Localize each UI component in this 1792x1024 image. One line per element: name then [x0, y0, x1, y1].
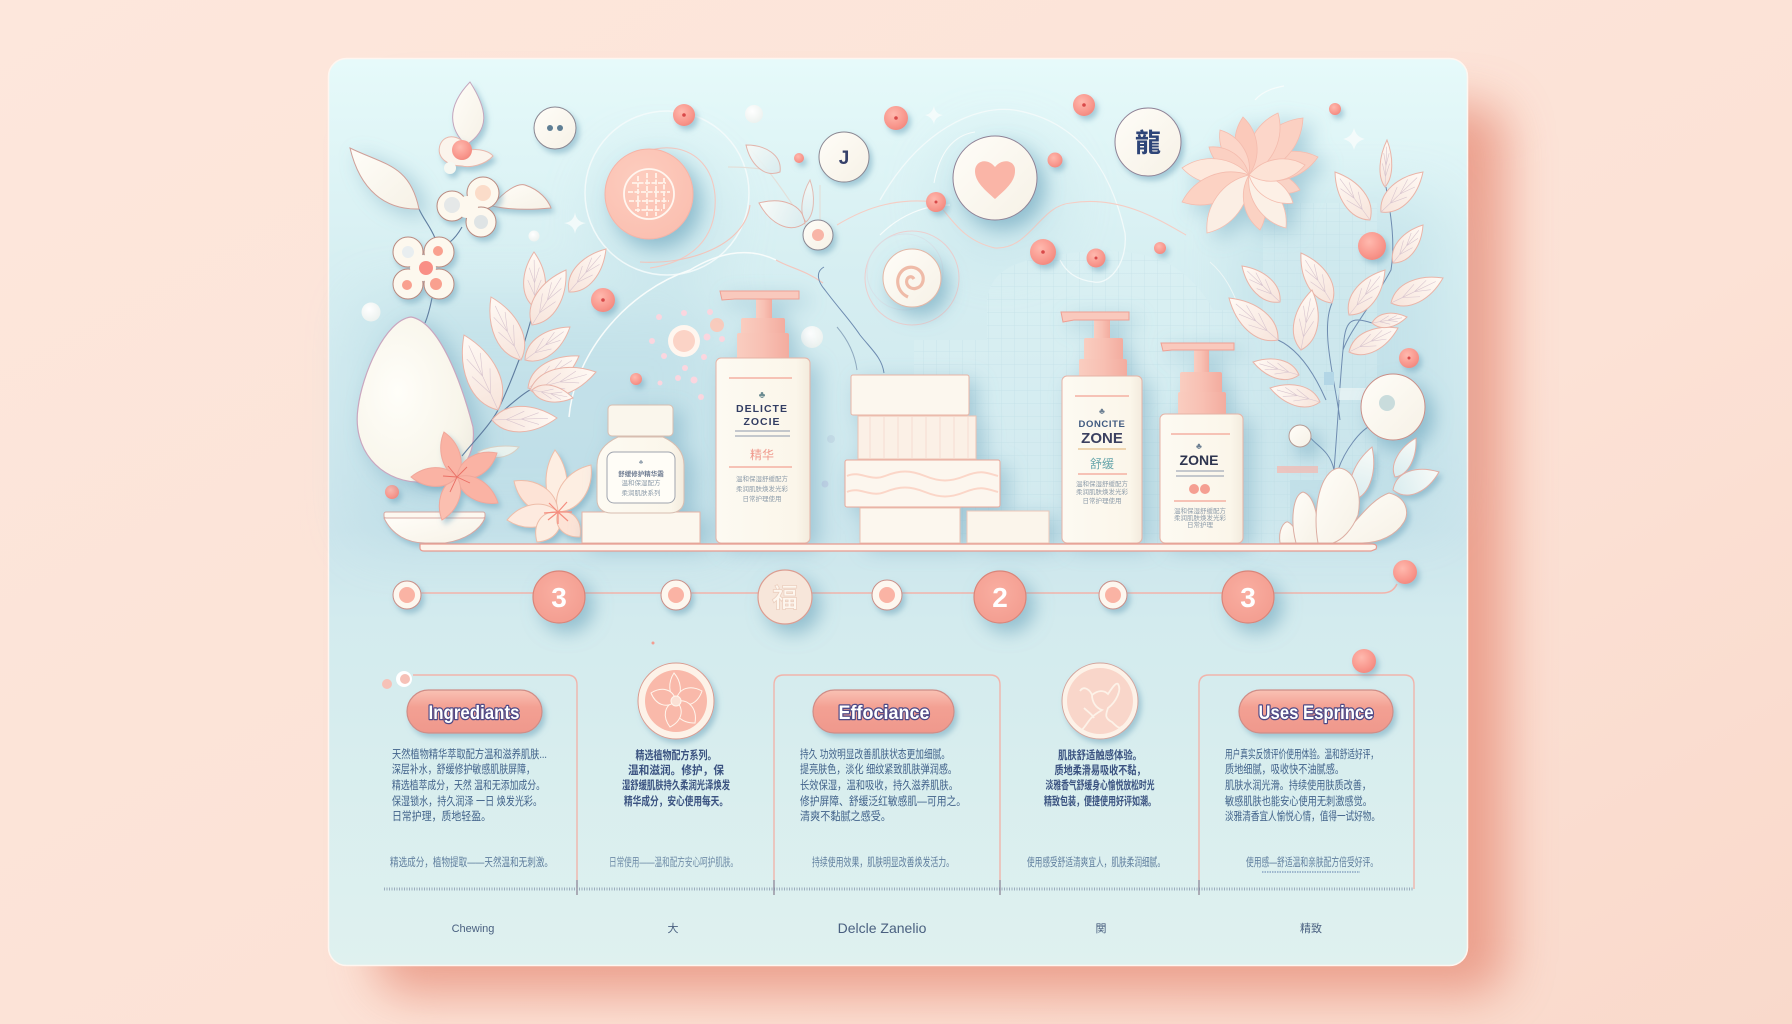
- product: pump bottle one: 温和保湿舒缓配方: [736, 474, 788, 483]
- panel: ingredients: [382, 671, 553, 869]
- product: pump bottle one: 日常护理使用: [742, 494, 782, 503]
- decorative pink and white dots: [362, 94, 1419, 499]
- accent dot: [1352, 649, 1376, 673]
- product: pump bottle two: ♣: [1099, 406, 1105, 416]
- heading pill: Effociance: [838, 703, 930, 724]
- product: pump bottle two: 温和保湿舒缓配方: [1076, 479, 1128, 488]
- timeline line: [407, 584, 1397, 593]
- footer labels: 大: [668, 921, 678, 935]
- body text: 长效保湿，温和吸收，持久滋养肌肤。: [800, 778, 958, 792]
- product: pump bottle one: ♣: [759, 390, 766, 401]
- product: pump bottle one: 柔润肌肤焕发光彩: [736, 484, 788, 493]
- botanical: left sprig and water drop: [357, 242, 614, 484]
- four petal flower: [393, 237, 454, 299]
- botanical: bottom right petals: [1280, 434, 1443, 543]
- soft blue tint behind products: [360, 140, 1440, 540]
- heading pill: [813, 690, 954, 733]
- panel: user experience: [1225, 649, 1393, 872]
- product: pump bottle one: [716, 291, 810, 543]
- panel: flower medallion column: [609, 663, 738, 869]
- icon: pink disc with globe grid: [605, 149, 693, 239]
- flowing decorative lines: [569, 86, 1284, 417]
- clover flower: [437, 177, 499, 237]
- timeline: [393, 560, 1417, 624]
- heading pill: [1239, 690, 1393, 733]
- footer labels: 関: [1096, 922, 1106, 935]
- body text: 温和滋润。修护，保: [628, 763, 724, 777]
- timeline node: [393, 581, 421, 609]
- footer labels: 精致: [1300, 921, 1322, 935]
- decorative large and small spheres: [1289, 374, 1425, 447]
- footnote: 使用感—舒适温和亲肤配方倍受好评。: [1246, 855, 1378, 869]
- body text: [1044, 748, 1156, 808]
- footnote: 使用感受舒适清爽宜人，肌肤柔润细腻。: [1027, 855, 1165, 869]
- body text: 精选植萃成分，天然 温和无添加成分。: [392, 778, 545, 792]
- heading pill: Uses Esprince: [1258, 703, 1374, 724]
- body text: [622, 748, 730, 808]
- botanical: right sprig: [1221, 140, 1448, 473]
- footer labels: [452, 920, 1322, 936]
- icon: spiral button: [883, 249, 941, 307]
- jar lid: [608, 405, 673, 436]
- small accent dot: [652, 642, 654, 644]
- icon: kanji button: 龍: [1135, 128, 1161, 158]
- body text: 敏感肌肤也能安心使用无刺激感觉。: [1225, 794, 1372, 808]
- product: pump bottle three: 温和保湿舒缓配方: [1174, 506, 1226, 515]
- product: jar on box: ♣: [639, 459, 644, 466]
- icon: sparkles: [564, 106, 1365, 234]
- panel: efficiency: [800, 690, 966, 869]
- timeline node: [1099, 581, 1127, 609]
- icon: flower medallion: [638, 663, 714, 739]
- product: pump bottle two: 舒缓: [1090, 457, 1114, 471]
- product: jar on box: 温和保湿配方: [622, 478, 661, 487]
- step number 2: 2: [992, 582, 1008, 613]
- shelf: [420, 544, 1376, 551]
- icon: J number button: J: [839, 148, 849, 169]
- step number 2: [974, 571, 1026, 623]
- body text: 湿舒缓肌肤持久柔润光泽焕发: [622, 778, 730, 792]
- jar body: [597, 437, 684, 513]
- footer labels: Chewing: [452, 923, 494, 935]
- panel: figure medallion column: [1027, 663, 1165, 869]
- body text: 肌肤舒适触感体验。: [1058, 748, 1142, 762]
- product: pump bottle one: DELICTE: [736, 403, 788, 415]
- step number 3: [1222, 571, 1274, 623]
- heading pill: [407, 690, 542, 733]
- body text: 淡雅香气舒缓身心愉悦放松时光: [1046, 778, 1155, 792]
- product: pump bottle three: 柔润肌肤焕发光彩: [1174, 513, 1226, 522]
- botanical: pale flower: [505, 449, 601, 548]
- footnote: 日常使用——温和配方安心呵护肌肤。: [609, 855, 738, 869]
- product: pump bottle two: ZONE: [1081, 430, 1123, 447]
- body text: 淡雅清香宜人愉悦心情，值得一试好物。: [1225, 809, 1380, 823]
- botanical: lotus flower: [1177, 108, 1321, 241]
- body text: 提亮肤色，淡化 细纹紧致肌肤弹润感。: [800, 762, 957, 776]
- body text: [392, 747, 547, 823]
- body text: 深层补水，舒缓修护敏感肌肤屏障，: [392, 762, 535, 776]
- body text: 持久 功效明显改善肌肤状态更加细腻。: [800, 747, 950, 761]
- body text: 质地细腻，吸收快不油腻感。: [1225, 762, 1344, 776]
- product: pump bottle two: [1061, 312, 1142, 543]
- product: pump bottle two: 柔润肌肤焕发光彩: [1076, 487, 1128, 496]
- product: pump bottle one: 精华: [750, 448, 774, 462]
- body text: 用户真实反馈评价使用体验。温和舒适好评，: [1225, 747, 1378, 761]
- body text: 精致包装，便捷使用好评如潮。: [1044, 794, 1156, 808]
- body text: 保湿锁水，持久润泽 一日 焕发光彩。: [392, 794, 542, 808]
- icon: heart button: [953, 136, 1037, 220]
- footnote: 持续使用效果，肌肤明显改善焕发活力。: [812, 855, 954, 869]
- product: pump bottle two: 日常护理使用: [1082, 496, 1122, 505]
- step number 3: 3: [1240, 582, 1256, 613]
- product: pump bottle two: DONCITE: [1079, 419, 1125, 430]
- accent dots: [382, 671, 412, 689]
- seal medallion: [758, 570, 812, 624]
- step number 3: 3: [551, 582, 567, 613]
- product: jar on box: [582, 405, 700, 543]
- card shadow: [376, 104, 1506, 994]
- product: pump bottle one: ZOCIE: [743, 416, 781, 428]
- botanical: coral flower: [411, 429, 503, 523]
- product: pump bottle three: 日常护理: [1187, 520, 1214, 529]
- body text: 修护屏障、舒缓泛红敏感肌—可用之。: [800, 794, 966, 808]
- body text: [800, 747, 966, 823]
- body text: [1225, 747, 1380, 823]
- water drop: [357, 317, 473, 484]
- icon: figure medallion: [1062, 663, 1138, 739]
- icon: J number button: [819, 132, 869, 182]
- timeline end dot: [1393, 560, 1417, 584]
- product: pump bottle three: ZONE: [1180, 452, 1218, 468]
- seal medallion: 福: [772, 583, 798, 613]
- timeline node: [872, 580, 902, 610]
- main card panel: [328, 58, 1468, 966]
- jar label: [607, 452, 675, 503]
- product: stacked cream jars: [845, 375, 1049, 543]
- sprig near heart: [728, 137, 833, 250]
- body text: 精选植物配方系列。: [636, 748, 716, 762]
- product: jar on box: 柔润肌肤系列: [622, 488, 660, 497]
- burst of small dots: [649, 309, 835, 488]
- big leaf: [350, 148, 419, 209]
- small bud flower: [439, 137, 493, 174]
- body text: 精华成分，安心使用每天。: [624, 794, 728, 808]
- icon: two dot button: [534, 107, 576, 149]
- body text: 质地柔滑易吸收不黏，: [1054, 763, 1146, 777]
- panel frames and dotted rule: [384, 675, 1414, 895]
- product: pump bottle three: [1160, 343, 1243, 543]
- product: jar on box: 舒缓修护精华霜: [618, 469, 664, 478]
- timeline node: [661, 580, 691, 610]
- footer labels: Delcle Zanelio: [838, 920, 927, 936]
- botanical: top left flowers and stems: [350, 82, 551, 323]
- body text: 清爽不黏腻之感受。: [800, 809, 891, 823]
- body text: 天然植物精华萃取配方温和滋养肌肤...: [392, 747, 547, 761]
- box: [582, 512, 700, 543]
- grid backdrop: [914, 203, 1377, 543]
- heading pill: Ingrediants: [428, 703, 520, 724]
- body text: 日常护理，质地轻盈。: [392, 809, 491, 823]
- step number 3: [533, 571, 585, 623]
- icon: bowl: [384, 512, 485, 543]
- footnote: 精选成分，植物提取——天然温和无刺激。: [390, 855, 553, 869]
- body text: 肌肤水润光滑。持续使用肤质改善，: [1225, 778, 1371, 792]
- icon: kanji button: [1115, 108, 1181, 176]
- product: pump bottle three: ♣: [1196, 441, 1202, 451]
- right leaf of clover: [492, 185, 551, 209]
- top leaf: [453, 82, 484, 145]
